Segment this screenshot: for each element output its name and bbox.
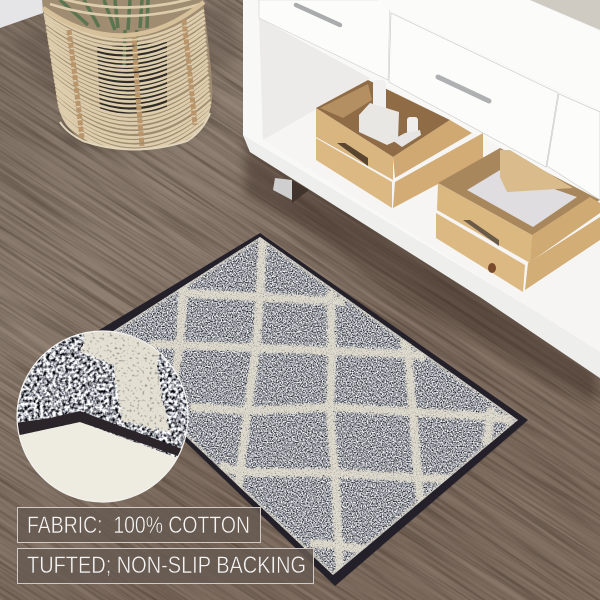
crate side upper (530, 197, 600, 262)
crate front upper (437, 183, 532, 263)
basket rim (43, 2, 204, 36)
towel (467, 170, 577, 227)
countertop (530, 0, 600, 30)
cabinet foot (273, 178, 309, 203)
rug pile (113, 237, 518, 575)
label: backing: TUFTED; NON-SLIP BACKING (27, 552, 306, 579)
label: fabric: FABRIC: 100% COTTON (27, 512, 250, 539)
wood knot (488, 263, 496, 273)
shelf front ledge (243, 135, 600, 378)
loofah (500, 150, 573, 192)
woven bindings (69, 20, 195, 146)
handle: top drawer (296, 5, 340, 25)
handle slot (463, 220, 499, 246)
handle: second drawer (438, 77, 489, 101)
zoom lens: backing detail (15, 329, 191, 510)
crate side upper (393, 120, 472, 178)
soap bottles (359, 80, 421, 147)
shelf surface (263, 78, 600, 352)
rug border (81, 233, 528, 586)
second drawer (389, 13, 558, 167)
magnified pile (15, 329, 191, 459)
crate side lower (525, 217, 600, 290)
right drawer (547, 94, 600, 200)
wicker basket with plant (42, 0, 213, 153)
label: backing (18, 548, 314, 584)
crate front lower (436, 213, 525, 292)
crate front upper (316, 108, 393, 180)
wooden crate with bottles (316, 80, 483, 208)
cabinet body (243, 0, 600, 378)
dark plant pot (97, 42, 167, 114)
lens ring (17, 331, 188, 502)
dark binding (15, 411, 185, 456)
handle slot (337, 143, 368, 166)
wall corner (0, 0, 43, 28)
magnified flecks (15, 329, 191, 459)
upper drawer panel (378, 0, 600, 110)
crate side lower (393, 133, 483, 208)
top drawer (259, 0, 390, 80)
plant leaves (60, 0, 148, 68)
white backing (20, 422, 177, 502)
pile speckle (113, 238, 517, 575)
niche back wall (259, 18, 370, 140)
cream lattice (90, 235, 518, 575)
rug shadow (84, 236, 524, 584)
crate front lower (316, 138, 392, 208)
wooden crate with towel (436, 148, 600, 292)
magnified cream stripe (83, 329, 170, 433)
diamond lattice rug (81, 232, 528, 586)
label: fabric (18, 508, 260, 542)
white vanity cabinet (243, 0, 600, 378)
